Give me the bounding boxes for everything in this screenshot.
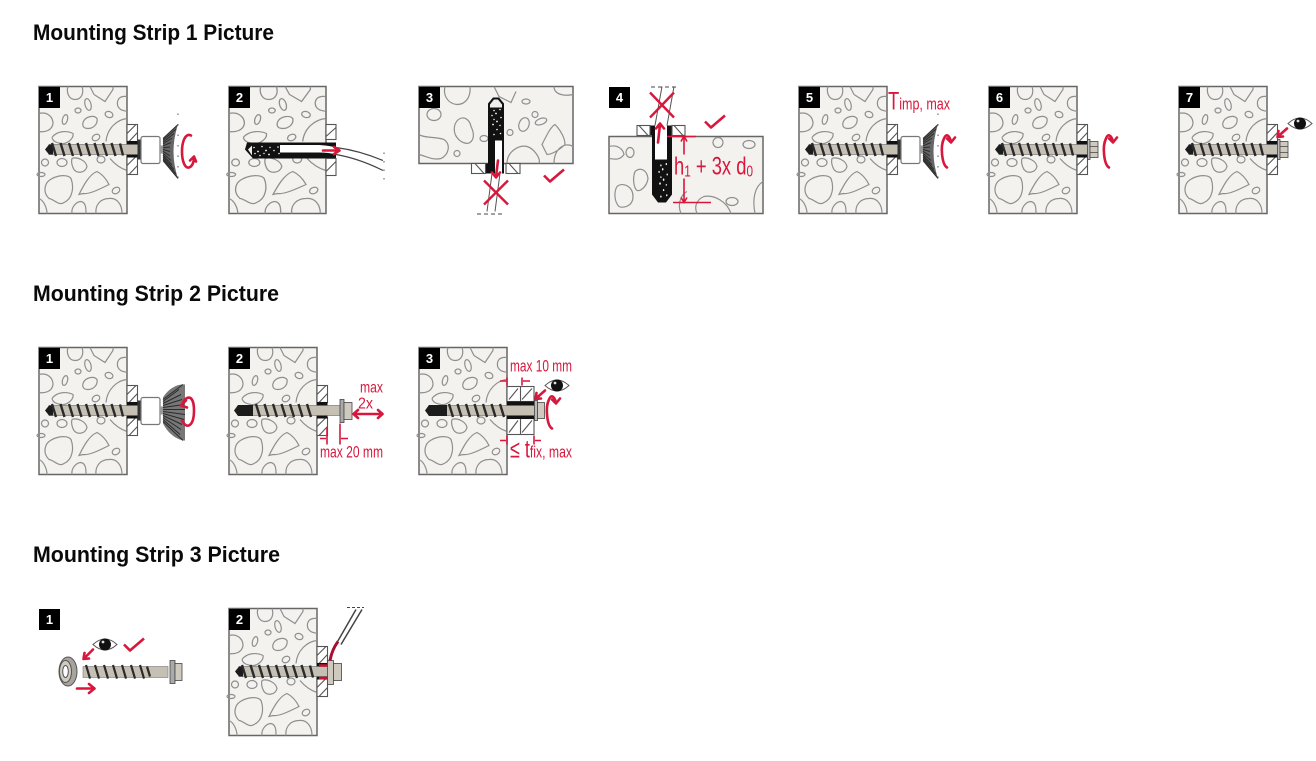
check mark [124, 638, 144, 650]
panel: strip 1 step 7 [1177, 86, 1312, 214]
tube [487, 174, 500, 212]
icon: eye [545, 380, 569, 392]
arrow: slide washer [77, 684, 94, 693]
label: max 20 mm: max 20 mm [320, 444, 383, 462]
label: max 10 mm: max 10 mm [510, 358, 572, 376]
badge 2: 2 [236, 90, 243, 105]
badge 1: 1 [46, 90, 53, 105]
dimension label: 1 [684, 164, 691, 180]
badge 1: 1 [46, 351, 53, 366]
panel: strip 1 step 5 [797, 86, 955, 214]
panel: strip 2 step 3 [417, 348, 572, 474]
loose bolt [83, 660, 182, 684]
red sealant [319, 666, 327, 678]
dimension label: 0 [746, 164, 753, 180]
panel: strip 2 step 1 [37, 348, 194, 474]
torque label: Timp, max [888, 88, 950, 116]
dimension lines [667, 136, 711, 202]
dimension: max 10 mm [500, 378, 530, 386]
arrow: down [492, 160, 500, 178]
cross [650, 92, 674, 118]
panel: strip 1 step 2 [227, 86, 384, 214]
arrow: rotation [181, 398, 194, 426]
cross [484, 180, 508, 204]
badge 4: 4 [616, 90, 624, 105]
badge 3 [419, 87, 440, 108]
dimension: t fix max [500, 436, 541, 444]
heading: Mounting Strip 3 Picture: Mounting Strip 3 Picture [33, 542, 280, 567]
dimension: max 20 mm [320, 424, 348, 444]
label: max 2x: 2x [358, 396, 373, 412]
fixture [472, 164, 520, 174]
arrow: blow out [323, 147, 340, 154]
badge 7: 7 [1186, 90, 1193, 105]
panel: strip 1 step 6 [987, 86, 1117, 214]
injection nozzle [330, 608, 364, 660]
drill hole with dust [650, 126, 672, 202]
badge 2 [229, 348, 250, 369]
brush fan [163, 384, 185, 440]
panel: strip 1 step 1 [37, 86, 196, 214]
arrow: max 2x double [354, 410, 382, 418]
blow-out tube [336, 148, 383, 170]
fixture [637, 126, 685, 136]
arrow: inspect [84, 650, 93, 659]
badge 2: 2 [236, 351, 243, 366]
badge 2: 2 [236, 612, 243, 627]
panel: strip 1 step 4 [609, 86, 763, 214]
check mark [544, 170, 564, 182]
arrow: rotation [942, 135, 955, 168]
double fixture [507, 386, 534, 434]
badge 1 [39, 609, 60, 630]
heading: Mounting Strip 2 Picture: Mounting Strip 2 Picture [33, 281, 279, 306]
badge 4 [609, 87, 630, 108]
arrow: rotation [182, 135, 196, 168]
washer and nut [328, 660, 342, 684]
arrow: inspect [536, 390, 545, 399]
label: t fix max: ≤ tfix, max [510, 436, 572, 464]
panel: strip 3 step 1 [39, 609, 182, 693]
arrow: up [656, 124, 664, 142]
bolt installed [425, 400, 544, 420]
washer ring [59, 657, 77, 686]
panel: strip 2 step 2 [227, 348, 383, 474]
drill hole with dust [486, 98, 504, 174]
icon: eye [1288, 118, 1312, 130]
drill hole with dust [245, 142, 336, 158]
check mark [705, 116, 725, 128]
badge 3: 3 [426, 90, 433, 105]
badge 1: 1 [46, 612, 53, 627]
dimension label: + 3x d [691, 152, 746, 180]
arrow: rotation [547, 396, 560, 428]
badge 1 [39, 87, 60, 108]
arrow: rotation [1104, 135, 1117, 168]
label: max 2x [358, 380, 383, 412]
dimension label: h [674, 152, 688, 180]
heading: Mounting Strip 1 Picture: Mounting Strip 1 Picture [33, 20, 274, 45]
icon: eye [93, 638, 117, 650]
badge 2 [229, 87, 250, 108]
badge 6: 6 [996, 90, 1003, 105]
panel: strip 3 step 2 [227, 608, 364, 736]
raised bolt [234, 400, 352, 422]
panel: strip 1 step 3 [419, 86, 573, 214]
badge 3: 3 [426, 351, 433, 366]
label: max 2x: max [360, 380, 383, 396]
badge 5: 5 [806, 90, 813, 105]
badge 1 [39, 348, 60, 369]
arrow: inspect [1278, 128, 1287, 137]
badge 5 [799, 87, 820, 108]
tube [655, 86, 674, 126]
badge 3 [419, 348, 440, 369]
fixture [326, 124, 336, 176]
